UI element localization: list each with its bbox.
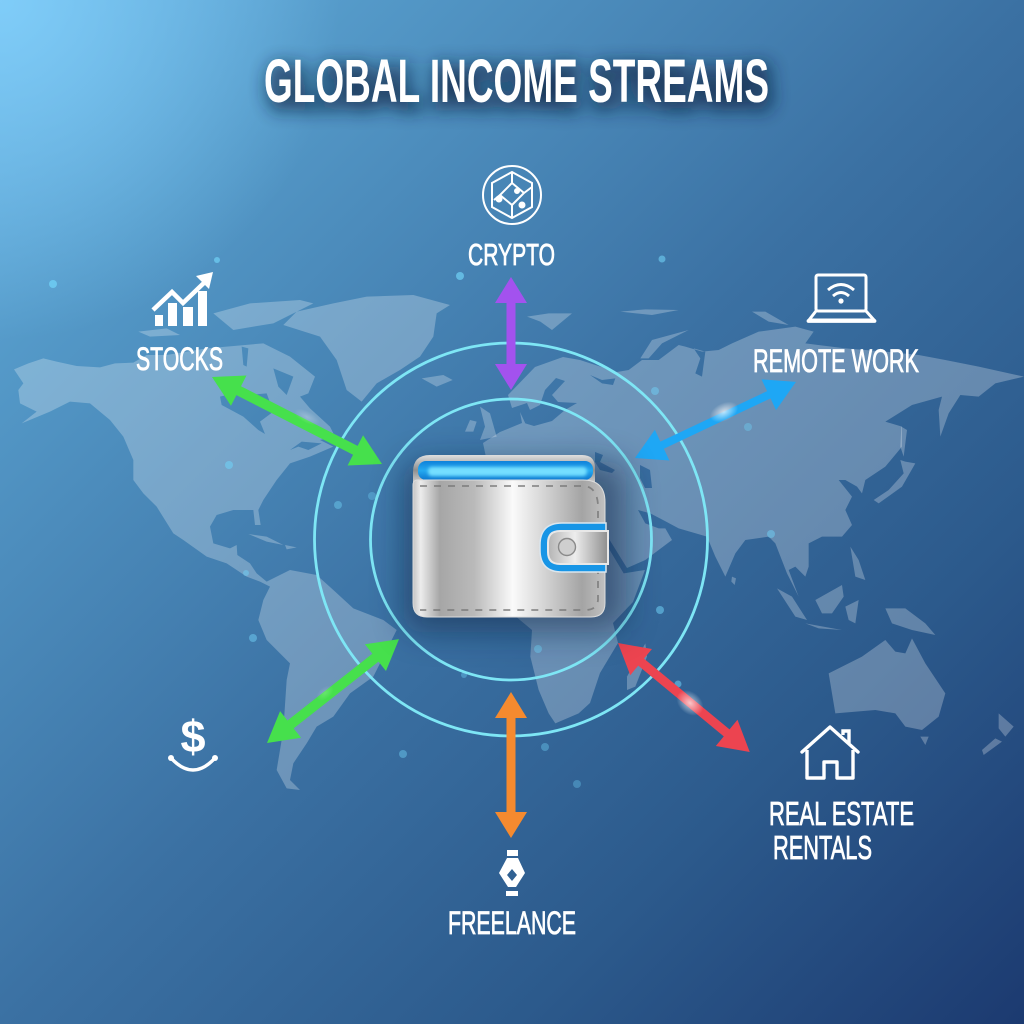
icon: pen nib (499, 850, 525, 896)
icon: laptop with wifi (808, 275, 874, 321)
title (264, 47, 772, 121)
arrow: remote work (628, 367, 803, 473)
map: Americas and Greenland (14, 295, 497, 790)
map: Eurasia, Africa and Oceania (479, 309, 1024, 755)
arrow: side income (256, 626, 410, 756)
wallet front (413, 480, 605, 617)
clasp button (558, 538, 576, 556)
item: remote work (753, 275, 919, 379)
central wallet (404, 455, 626, 632)
blue band (418, 461, 593, 480)
clasp blue surround (540, 523, 606, 572)
arrow glows (292, 398, 741, 721)
corner light (0, 0, 340, 340)
floating dots (49, 256, 775, 788)
label: real estate: REAL ESTATE (769, 795, 914, 832)
wallet shadow (404, 462, 626, 632)
arrow: stocks (204, 362, 390, 479)
clasp strap (548, 531, 608, 564)
label: crypto: CRYPTO (468, 237, 555, 272)
label: freelance: FREELANCE (448, 905, 576, 941)
icon: house (802, 727, 858, 778)
item: real estate rentals (769, 727, 914, 866)
item: crypto (468, 166, 555, 272)
icon: dollar with smile: $ (180, 711, 206, 762)
item: side income (168, 711, 218, 770)
item: stocks (136, 272, 223, 377)
label: stocks: STOCKS (136, 341, 223, 377)
band highlight (428, 467, 587, 476)
label: rentals: RENTALS (773, 829, 872, 866)
stitching (420, 486, 598, 610)
concentric rings (314, 343, 708, 736)
arrow: real estate rentals (607, 630, 761, 765)
label: remote work: REMOTE WORK (753, 343, 919, 379)
wallet back with blue band (413, 455, 595, 485)
icon: crypto hexagon coin (483, 166, 541, 224)
world map (14, 295, 1024, 790)
item: freelance (448, 850, 576, 941)
arrow: crypto (495, 277, 527, 390)
arrow: freelance (495, 692, 527, 838)
icon: rising bar chart (153, 272, 213, 326)
